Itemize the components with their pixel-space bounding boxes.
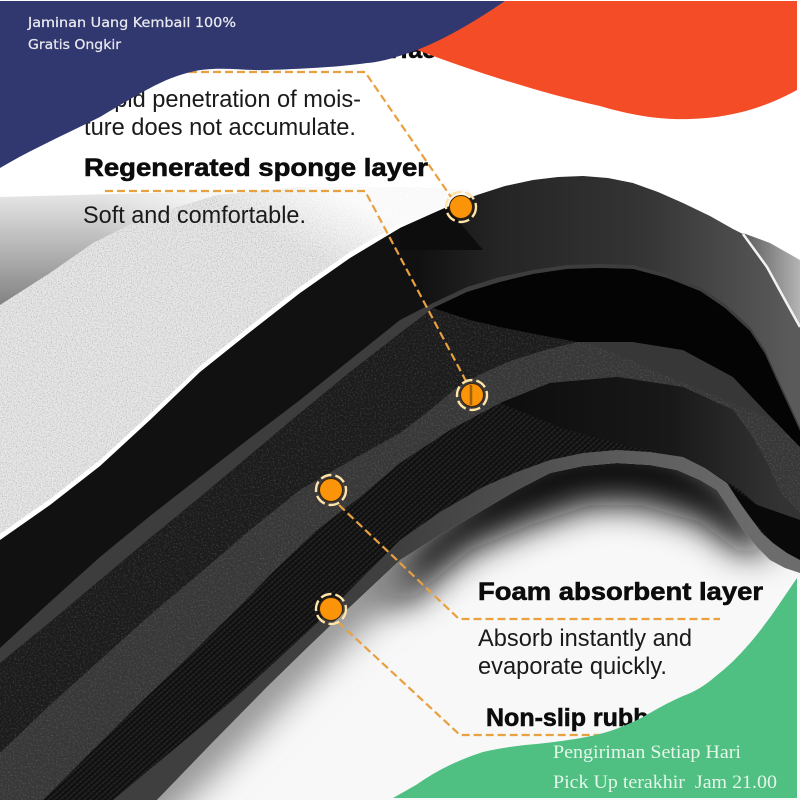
layer: fabric top (0, 187, 471, 534)
layer: foam light (0, 342, 800, 800)
layer: woven (43, 377, 800, 800)
leader line: foam layer (339, 505, 720, 619)
fabric white edge (0, 223, 420, 560)
leader line: sponge layer (105, 191, 467, 383)
orange corner shape (417, 1, 797, 119)
white highlight line (743, 234, 800, 327)
text: top layer description: Rapid penetration of mois- (84, 86, 361, 113)
text: top layer description: ture does not accumulate. (84, 114, 356, 141)
marker: top layer (446, 192, 476, 222)
text: navy promo (27, 16, 236, 53)
layer: right black gap (700, 465, 800, 565)
navy corner shape (0, 1, 505, 168)
marker: sponge layer (457, 380, 487, 410)
layer: dark upper band and arch (0, 176, 800, 800)
marker: rubber layer (316, 594, 346, 624)
text: green promo: Pick Up terakhir Jam 21.00 (553, 772, 777, 793)
layer: thin gray line (0, 264, 800, 800)
upper dark wedge (400, 207, 483, 250)
text: sponge description: Soft and comfortable. (83, 202, 306, 229)
leader line: top layer (105, 72, 451, 197)
leader line: rubber layer (338, 622, 620, 735)
heading: regenerated sponge layer: Regenerated sponge layer (84, 154, 428, 182)
text: top layer description (84, 86, 361, 141)
text: green promo: Pengiriman Setiap Hari (553, 742, 741, 763)
text: foam description (478, 625, 692, 680)
layer: foam dark (0, 268, 800, 800)
text: navy promo: Gratis Ongkir (28, 38, 122, 53)
text: navy promo: Jaminan Uang Kembail 100% (27, 16, 236, 31)
text: green promo (553, 742, 777, 793)
foam texture (0, 290, 800, 800)
heading: non-slip rubber: Non-slip rubber (486, 704, 672, 732)
marker: foam layer (316, 475, 346, 505)
green corner shape (393, 578, 797, 798)
text: top layer heading, partly hidden: Fabric surface (279, 36, 450, 64)
text: foam description: Absorb instantly and (478, 625, 692, 652)
shadow inside arch (360, 435, 775, 600)
layer: inner dark under foam (500, 377, 800, 520)
heading: foam absorbent layer: Foam absorbent layer (478, 578, 763, 606)
right gray sheet (743, 233, 800, 340)
floor area under mat (157, 463, 800, 800)
shadow along lower left edge (120, 565, 410, 800)
text: foam description: evaporate quickly. (478, 653, 667, 680)
layer: gray base band (113, 450, 800, 800)
black wedge (433, 268, 800, 447)
illustration: layered mat cross-section (0, 176, 800, 800)
background shadow sheet (0, 190, 270, 312)
